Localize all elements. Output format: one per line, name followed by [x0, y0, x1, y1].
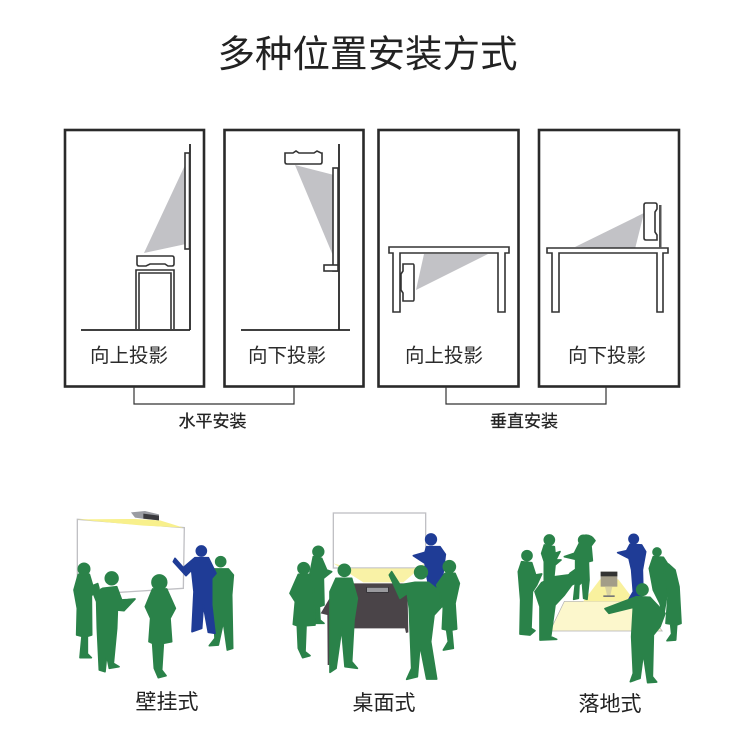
person: left woman — [74, 563, 99, 658]
projector — [131, 511, 159, 520]
projection beam — [416, 254, 488, 290]
bracket: vertical installation — [446, 387, 606, 404]
panel: horizontal downward projection — [224, 130, 364, 386]
light beam — [333, 563, 426, 582]
table — [547, 248, 668, 312]
label: horizontal installation: 水平安装 — [178, 412, 246, 431]
projection screen — [77, 519, 184, 595]
projector — [644, 203, 657, 240]
wall and floor — [241, 144, 350, 330]
person: blue presenter — [618, 534, 646, 599]
table — [321, 583, 408, 665]
bracket: horizontal installation — [134, 387, 294, 404]
wall and floor — [81, 144, 190, 330]
label: wall mount: 壁挂式 — [136, 691, 198, 714]
projection beam — [144, 163, 186, 253]
screen — [659, 205, 662, 248]
person: pointing man front — [605, 584, 665, 683]
person: right man — [649, 548, 668, 617]
label: tabletop mount: 桌面式 — [352, 692, 416, 715]
person: far left man — [518, 551, 542, 635]
scene: wall mount — [74, 511, 233, 678]
projector — [285, 151, 322, 164]
label: 向下投影 — [248, 345, 326, 367]
panel: vertical downward projection — [539, 130, 679, 386]
table — [389, 247, 509, 312]
label: vertical installation: 垂直安装 — [490, 412, 558, 431]
light beam — [583, 579, 635, 601]
person: back woman — [310, 546, 332, 623]
person: left woman — [290, 563, 315, 658]
person: woman with raised arm — [564, 535, 595, 599]
projection beam — [295, 165, 334, 258]
scene: tabletop mount — [290, 513, 459, 679]
projector — [367, 587, 388, 592]
label: 向上投影 — [90, 345, 168, 367]
person: right woman — [663, 564, 681, 641]
screen — [185, 153, 190, 249]
person: left man — [330, 564, 357, 672]
person: back woman — [542, 535, 561, 583]
person: centre woman — [145, 575, 175, 678]
light beam — [77, 519, 183, 528]
title: 多种位置安装方式 — [218, 33, 518, 75]
floor projection area — [550, 601, 662, 631]
label: 向上投影 — [405, 345, 483, 367]
person: pointing man — [389, 566, 442, 679]
panel: vertical upward projection — [378, 130, 518, 386]
person: right man — [209, 557, 233, 650]
panel: horizontal upward projection — [65, 130, 204, 386]
label: 向下投影 — [568, 345, 646, 367]
person: blue presenter — [173, 546, 216, 633]
person: blue presenter — [413, 534, 445, 608]
projector — [601, 572, 617, 597]
person: right woman — [437, 561, 459, 650]
screen — [333, 168, 338, 271]
person: man with notebook — [93, 572, 135, 672]
person: bending man — [535, 570, 581, 640]
scene: floor mount — [518, 534, 681, 683]
label: floor mount: 落地式 — [578, 693, 642, 716]
projector — [401, 264, 414, 301]
wall bracket — [324, 265, 338, 271]
projector — [137, 256, 174, 266]
stand — [136, 270, 174, 329]
projection screen — [333, 513, 426, 568]
projection beam — [575, 213, 644, 249]
